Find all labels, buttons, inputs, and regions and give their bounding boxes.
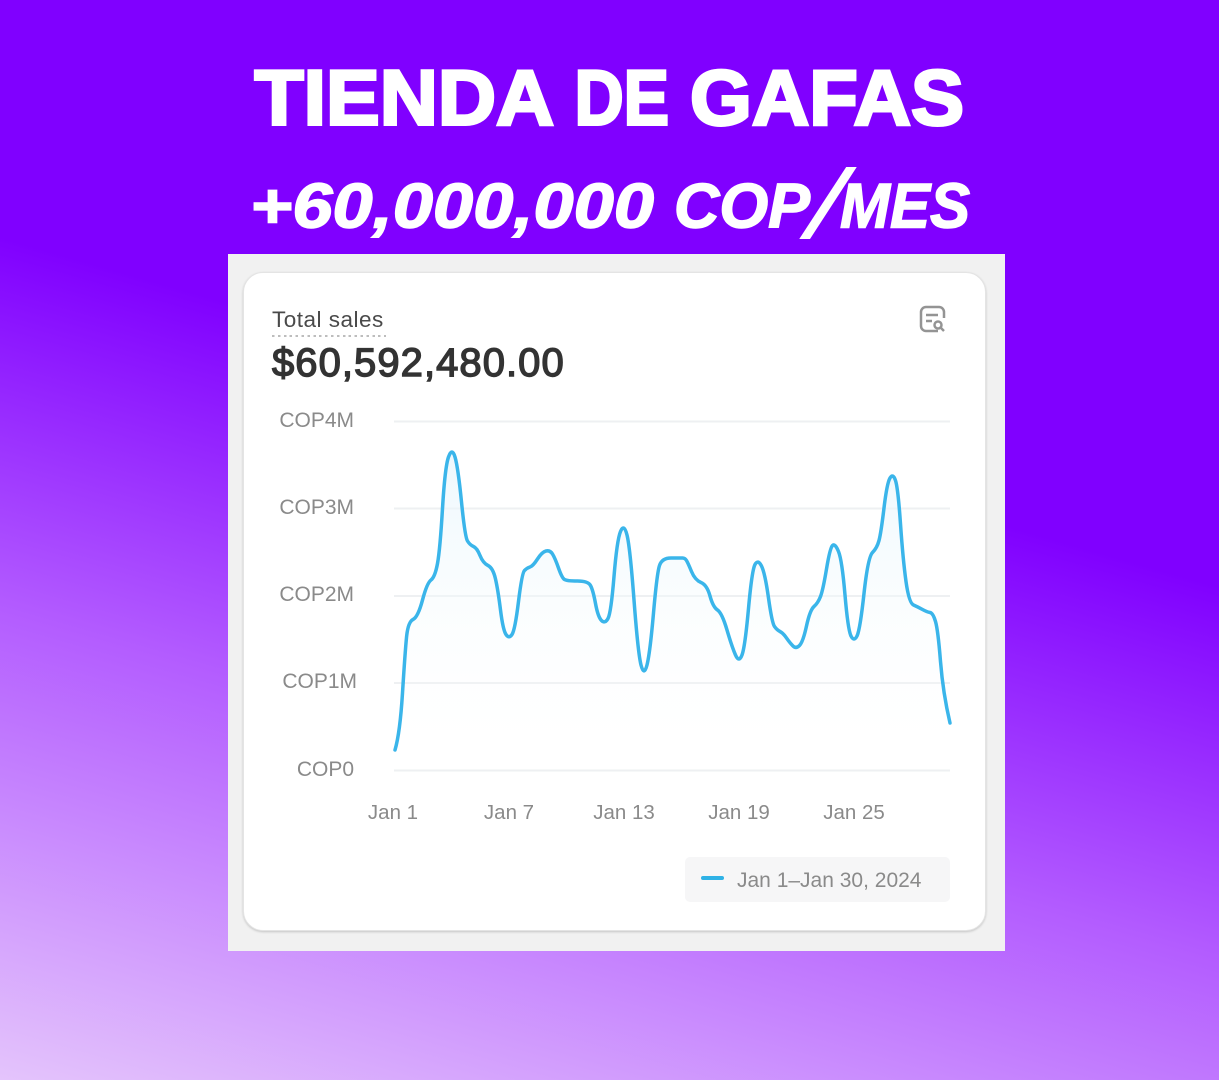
dotted underline [272,335,386,337]
sales line [395,452,950,750]
subtitle [250,149,970,259]
title: GAFAS [690,54,964,142]
area fill [395,452,950,770]
subtitle: +60,000,000 [250,172,654,242]
x axis labels: Jan 1 [368,801,418,824]
y axis labels: COP3M [279,496,354,519]
legend swatch [701,876,724,880]
title: TIENDA [254,54,554,142]
legend label: Jan 1–Jan 30, 2024 [737,869,922,892]
grid lines [394,422,950,770]
legend [685,857,950,902]
y axis labels: COP1M [282,670,357,693]
x axis labels: Jan 7 [484,801,534,824]
x axis labels: Jan 25 [823,801,885,824]
subtitle: COP [674,172,811,242]
panel: screenshot background [228,254,1005,951]
sales value: $60,592,480.00 [272,341,565,385]
heading: total sales: Total sales [272,307,384,332]
y axis labels: COP0 [297,758,354,781]
y axis labels: COP4M [279,409,354,432]
title [254,54,964,142]
x axis labels [368,801,885,824]
icon: report search [921,307,944,331]
y axis labels [279,409,357,781]
subtitle: MES [840,172,970,242]
heading block [250,54,970,254]
title: DE [574,54,669,142]
y axis labels: COP2M [279,583,354,606]
panel: sales card [243,272,986,931]
x axis labels: Jan 13 [593,801,655,824]
x axis labels: Jan 19 [708,801,770,824]
